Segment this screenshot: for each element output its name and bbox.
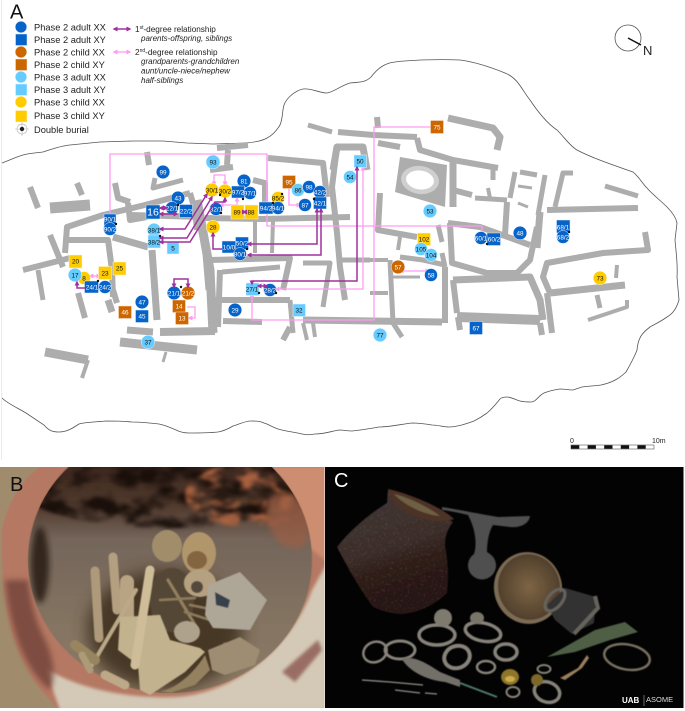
left page rule — [0, 0, 2, 460]
burial markers: 48 — [516, 230, 524, 237]
legend: burial symbols: Phase 2 child XX — [34, 48, 105, 58]
burial markers: 29 — [231, 307, 239, 314]
first-degree lines — [77, 167, 357, 288]
burial markers: 94/1 — [272, 205, 285, 212]
burial markers: 10/0 — [223, 244, 236, 251]
legend: burial symbols: Phase 2 adult XX — [34, 22, 106, 32]
burial markers: 99 — [159, 169, 167, 176]
burial markers: 20 — [72, 258, 79, 265]
burial markers: 90/1 — [104, 216, 117, 223]
north arrow — [615, 25, 652, 58]
burial markers: 105 — [416, 246, 427, 253]
burial markers: 87 — [301, 202, 309, 209]
panel A: settlement plan — [2, 0, 679, 460]
panel B letter: B — [10, 474, 23, 496]
building walls — [23, 117, 648, 378]
legend: burial symbols: Phase 3 adult XY — [34, 85, 106, 95]
photo: bowl and flask — [487, 546, 598, 634]
burial markers: 24/2 — [99, 284, 112, 291]
panel B: burial jar photograph — [0, 467, 324, 708]
burial markers: 21/2 — [182, 290, 195, 297]
burial markers: 45 — [138, 314, 146, 320]
site outline — [2, 60, 679, 435]
legend: burial symbols: Phase 3 adult XX — [34, 72, 106, 82]
burial markers: 85/2 — [272, 195, 285, 202]
logo: UAB — [622, 696, 640, 705]
burial markers: 54 — [346, 174, 354, 181]
legend: relationship key: 2 — [135, 48, 140, 57]
burial markers: 81 — [240, 178, 248, 185]
legend: relationship key: aunt/uncle-niece/nephew — [141, 66, 231, 76]
panel A letter: A — [10, 2, 24, 24]
burial markers: 46 — [121, 309, 129, 316]
burial markers: 67 — [472, 325, 480, 332]
burial markers: 50 — [356, 158, 364, 165]
burial markers: 24/1 — [86, 284, 99, 291]
burial markers: 53 — [426, 208, 434, 215]
legend: relationship key: -degree relationship — [145, 48, 218, 57]
burial markers: 102 — [419, 236, 430, 243]
burial markers: 37 — [144, 339, 152, 346]
kinship lines — [90, 127, 482, 320]
burial markers: 22/2 — [180, 208, 193, 215]
burial markers: 38/1 — [148, 227, 161, 234]
burial markers: 97/2 — [232, 189, 245, 196]
legend: burial symbols: Phase 3 child XY — [34, 111, 105, 121]
photo: copper blade and awl — [362, 622, 638, 697]
burial markers: 98 — [305, 184, 313, 191]
legend: burial symbols: Phase 3 child XX — [34, 98, 105, 108]
burial markers: 60/2 — [488, 236, 501, 243]
burial markers: 43 — [174, 195, 182, 202]
burial markers: 104 — [426, 252, 437, 259]
burial markers: 90/2 — [104, 226, 117, 233]
burial markers: 57 — [394, 264, 402, 271]
burial markers: 75 — [433, 124, 441, 131]
burial markers: 68/2 — [557, 234, 570, 241]
photo: silver rings — [360, 609, 652, 706]
burial markers: 32 — [295, 307, 303, 314]
legend: relationship key: parents-offspring, siblings — [140, 34, 232, 43]
burial markers: 8 — [82, 275, 86, 282]
burial markers: 42/1 — [314, 200, 327, 207]
burial markers: 58 — [427, 272, 435, 279]
panel C letter: C — [334, 470, 348, 492]
legend: relationship key: 1 — [135, 25, 140, 34]
legend: relationship key: half-siblings — [141, 76, 183, 85]
burial markers: 97/1 — [244, 190, 257, 197]
burial markers: 86 — [294, 187, 302, 194]
double burial markers — [97, 193, 570, 294]
north arrow: N — [643, 43, 652, 58]
burial markers: 5 — [171, 245, 175, 252]
legend: relationship key — [114, 25, 240, 85]
burial markers: 42/2 — [314, 189, 327, 196]
photo: soot and rust on inner wall — [28, 467, 310, 693]
burial markers: 95 — [285, 179, 293, 186]
photo: carinated jar — [337, 489, 454, 614]
burial markers: 28/2 — [264, 287, 277, 294]
burial markers: 38/2 — [148, 239, 161, 246]
panel C: grave goods photograph — [325, 467, 684, 708]
burial markers: 89 — [233, 209, 241, 216]
burial markers: 17 — [71, 272, 79, 279]
scale bar — [570, 438, 666, 449]
burial markers: 82/1 — [210, 206, 223, 213]
burial markers: 47 — [138, 299, 146, 306]
legend: burial symbols: Double burial — [34, 125, 89, 135]
scale bar: 10m — [652, 438, 666, 445]
scale bar: 0 — [570, 438, 574, 445]
legend: relationship key: nd — [140, 48, 145, 54]
burial markers: 27/1 — [246, 286, 259, 293]
tower — [395, 157, 447, 207]
burial markers: 60/1 — [475, 235, 488, 242]
legend: relationship key: grandparents-grandchildren — [141, 57, 240, 66]
legend: burial symbols: Phase 2 child XY — [34, 60, 105, 70]
burial markers: 30/1 — [206, 187, 219, 194]
burial markers: 21/1 — [168, 290, 181, 297]
photo: skeletal remains — [75, 530, 267, 695]
legend: burial symbols: Phase 2 adult XY — [34, 35, 106, 45]
burial markers: 13 — [178, 315, 186, 322]
burial markers: 22/1 — [166, 205, 179, 212]
logo: ASOME — [646, 695, 673, 704]
burial markers: 14 — [175, 303, 183, 310]
burial markers: 88 — [247, 209, 255, 216]
photo: ground and jar — [0, 467, 324, 708]
legend: burial symbols — [15, 21, 106, 136]
burial markers: 68/1 — [557, 224, 570, 231]
photo: black backdrop — [325, 467, 684, 708]
burial markers: 25 — [116, 265, 123, 272]
photo: halberd — [442, 507, 530, 579]
burial markers: 28 — [209, 224, 217, 231]
logo — [622, 695, 673, 706]
legend: relationship key: -degree relationship — [143, 25, 216, 34]
burial markers: 16 — [147, 206, 159, 218]
burial markers: 77 — [376, 332, 384, 339]
burial markers: 94/2 — [260, 205, 273, 212]
burial markers: 50/2 — [236, 240, 249, 247]
burial markers — [68, 120, 607, 349]
burial markers: 73 — [596, 275, 604, 282]
burial markers: 30/2 — [219, 188, 232, 195]
burial markers: 80/1 — [234, 251, 247, 258]
burial markers: 93 — [209, 159, 217, 166]
burial markers: 23 — [101, 270, 109, 277]
legend: relationship key: st — [140, 25, 144, 31]
